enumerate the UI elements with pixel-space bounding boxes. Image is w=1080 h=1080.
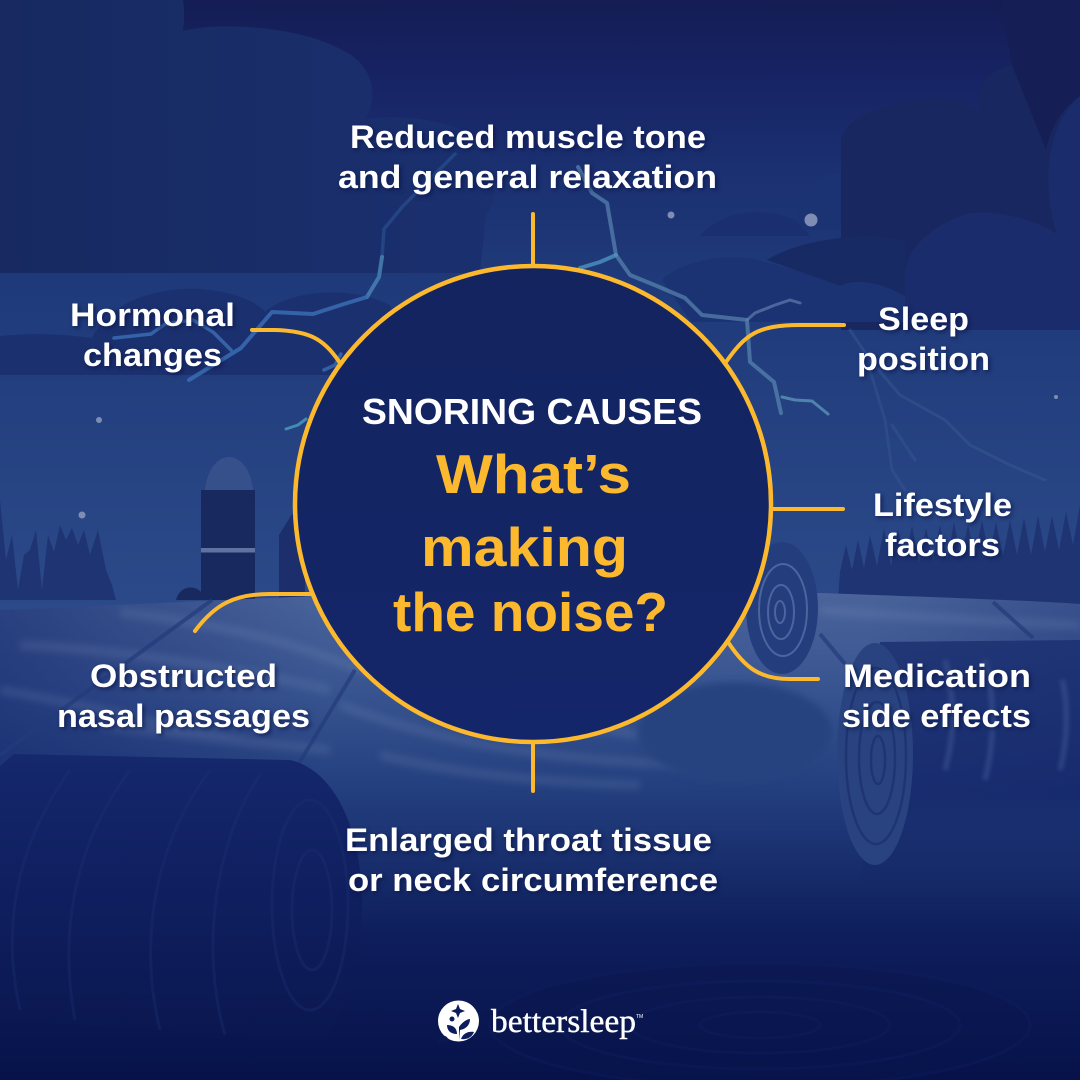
trademark: TM	[636, 1014, 643, 1020]
label: obstructed nasal passages: nasal passages	[57, 698, 310, 734]
connector: sleep position	[726, 325, 844, 362]
field tracks	[0, 600, 1033, 770]
tree lines	[0, 500, 1080, 606]
connector: lifestyle factors	[772, 507, 843, 511]
field	[0, 593, 1080, 1080]
label: enlarged throat tissue: or neck circumference	[348, 862, 718, 898]
label: sleep position	[857, 301, 990, 377]
distant hay bale	[638, 542, 832, 782]
label: hormonal changes: Hormonal	[70, 297, 235, 333]
title: what's making the noise: What’s	[436, 443, 631, 505]
wordmark: bettersleep	[491, 1004, 636, 1040]
barn	[279, 514, 305, 600]
label: sleep position: position	[857, 341, 990, 377]
title: what's making the noise: making	[421, 516, 628, 578]
label: reduced muscle tone: Reduced muscle tone	[350, 119, 706, 155]
silo	[176, 457, 255, 600]
label: obstructed nasal passages: Obstructed	[90, 658, 277, 694]
storm clouds	[0, 0, 1080, 375]
field stripes	[0, 610, 1080, 785]
central circle	[295, 266, 771, 742]
sky	[0, 0, 1080, 620]
pond ripples	[490, 963, 1030, 1080]
connector: enlarged throat tissue	[531, 742, 535, 791]
field shading	[0, 593, 1080, 800]
label: lifestyle factors: factors	[885, 527, 1000, 563]
label: medication side effects	[842, 658, 1031, 734]
connector: hormonal changes	[252, 330, 342, 366]
label: hormonal changes: changes	[83, 337, 222, 373]
connector: medication side effects	[728, 642, 818, 679]
connector: reduced muscle tone	[531, 214, 535, 266]
label: lifestyle factors	[873, 487, 1012, 563]
label: enlarged throat tissue: Enlarged throat tissue	[345, 822, 712, 858]
label: lifestyle factors: Lifestyle	[873, 487, 1012, 523]
eyebrow: snoring causes: SNORING CAUSES	[362, 391, 702, 432]
label: hormonal changes	[70, 297, 235, 373]
icon: sprout in moon	[438, 1000, 479, 1044]
label: reduced muscle tone: and general relaxation	[338, 159, 717, 195]
label: medication side effects: Medication	[843, 658, 1031, 694]
stars	[78, 212, 1058, 518]
label: enlarged throat tissue	[345, 822, 718, 898]
left hay bale	[0, 754, 362, 1040]
right hay bale	[837, 640, 1080, 890]
title: what's making the noise	[393, 443, 668, 643]
title: what's making the noise: the noise?	[393, 581, 668, 643]
connector: obstructed nasal passages	[195, 594, 314, 631]
label: medication side effects: side effects	[842, 698, 1031, 734]
logo	[438, 1000, 643, 1044]
label: sleep position: Sleep	[878, 301, 969, 337]
label: reduced muscle tone	[338, 119, 717, 195]
center heading	[362, 391, 702, 643]
label: obstructed nasal passages	[57, 658, 310, 734]
lightning bolts	[114, 154, 1045, 490]
